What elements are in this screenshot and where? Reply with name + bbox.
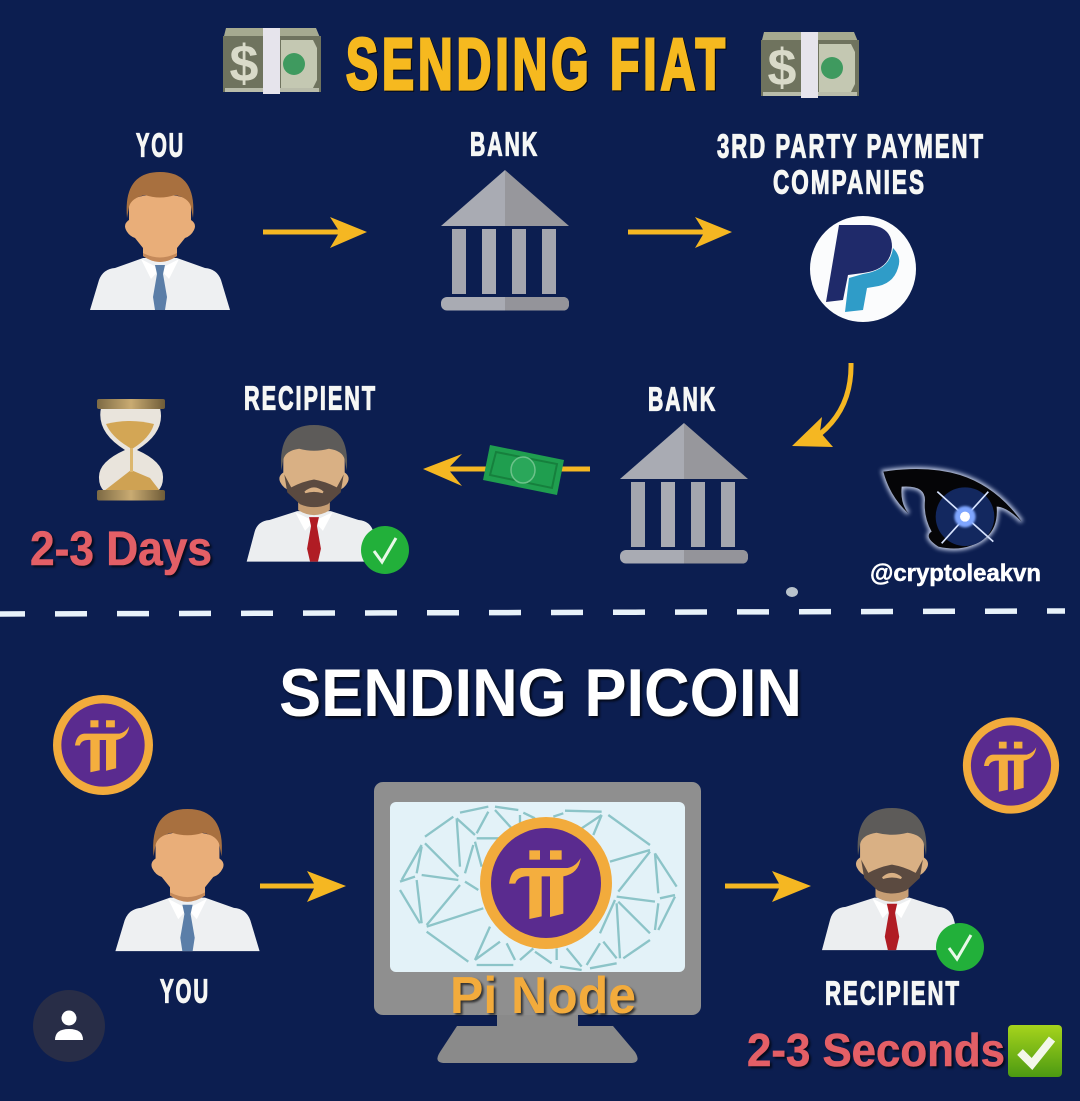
arrow: you to node <box>260 871 346 902</box>
text: 2-3 seconds: 2-3 Seconds <box>747 1024 1005 1076</box>
label: pi node: Pi Node <box>450 967 636 1025</box>
title: sending fiat: SENDING FIAT <box>346 25 729 105</box>
label: recipient: RECIPIENT <box>244 380 377 416</box>
icon: check <box>361 526 409 574</box>
icon: person you <box>115 809 260 951</box>
icon: money stack left <box>223 28 321 94</box>
arrow: bank to recipient with banknote <box>423 445 590 495</box>
label: bank two: BANK <box>648 380 717 418</box>
icon: check <box>936 923 984 971</box>
icon: pi node monitor <box>374 782 701 1063</box>
divider <box>0 611 1065 614</box>
arrow: you to bank <box>263 217 367 248</box>
title: sending picoin: SENDING PICOIN <box>279 655 802 731</box>
arrow: node to recipient <box>725 871 811 902</box>
icon: pi coin left <box>53 695 153 795</box>
icon: person you <box>90 172 230 310</box>
panel: sending fiat <box>30 25 985 576</box>
icon: check emoji <box>1008 1025 1062 1077</box>
label: bank: BANK <box>470 126 539 162</box>
arrow: bank to payment companies <box>628 217 732 248</box>
icon: money stack right <box>761 32 859 98</box>
label: you: YOU <box>136 126 185 164</box>
label: third party payment companies <box>717 128 985 200</box>
watermark: cryptoleakvn eye logo: @cryptoleakvn <box>870 560 1041 587</box>
icon: person recipient <box>247 425 381 562</box>
smudges <box>786 587 798 597</box>
icon: pi coin right <box>963 717 1059 814</box>
icon: bank two <box>620 423 748 564</box>
icon: person recipient <box>822 808 962 950</box>
panel: sending picoin <box>53 655 1062 1077</box>
icon: paypal <box>810 216 916 322</box>
icon: bank <box>441 170 569 310</box>
arrow: curved to second bank <box>792 363 851 447</box>
icon: hourglass <box>97 399 165 500</box>
icon: user avatar <box>33 990 105 1062</box>
label: you: YOU <box>160 972 210 1010</box>
label: third party payment companies: COMPANIES <box>773 164 926 200</box>
text: 2-3 days: 2-3 Days <box>30 523 212 576</box>
label: recipient: RECIPIENT <box>825 974 961 1012</box>
watermark: cryptoleakvn eye logo <box>870 469 1041 587</box>
